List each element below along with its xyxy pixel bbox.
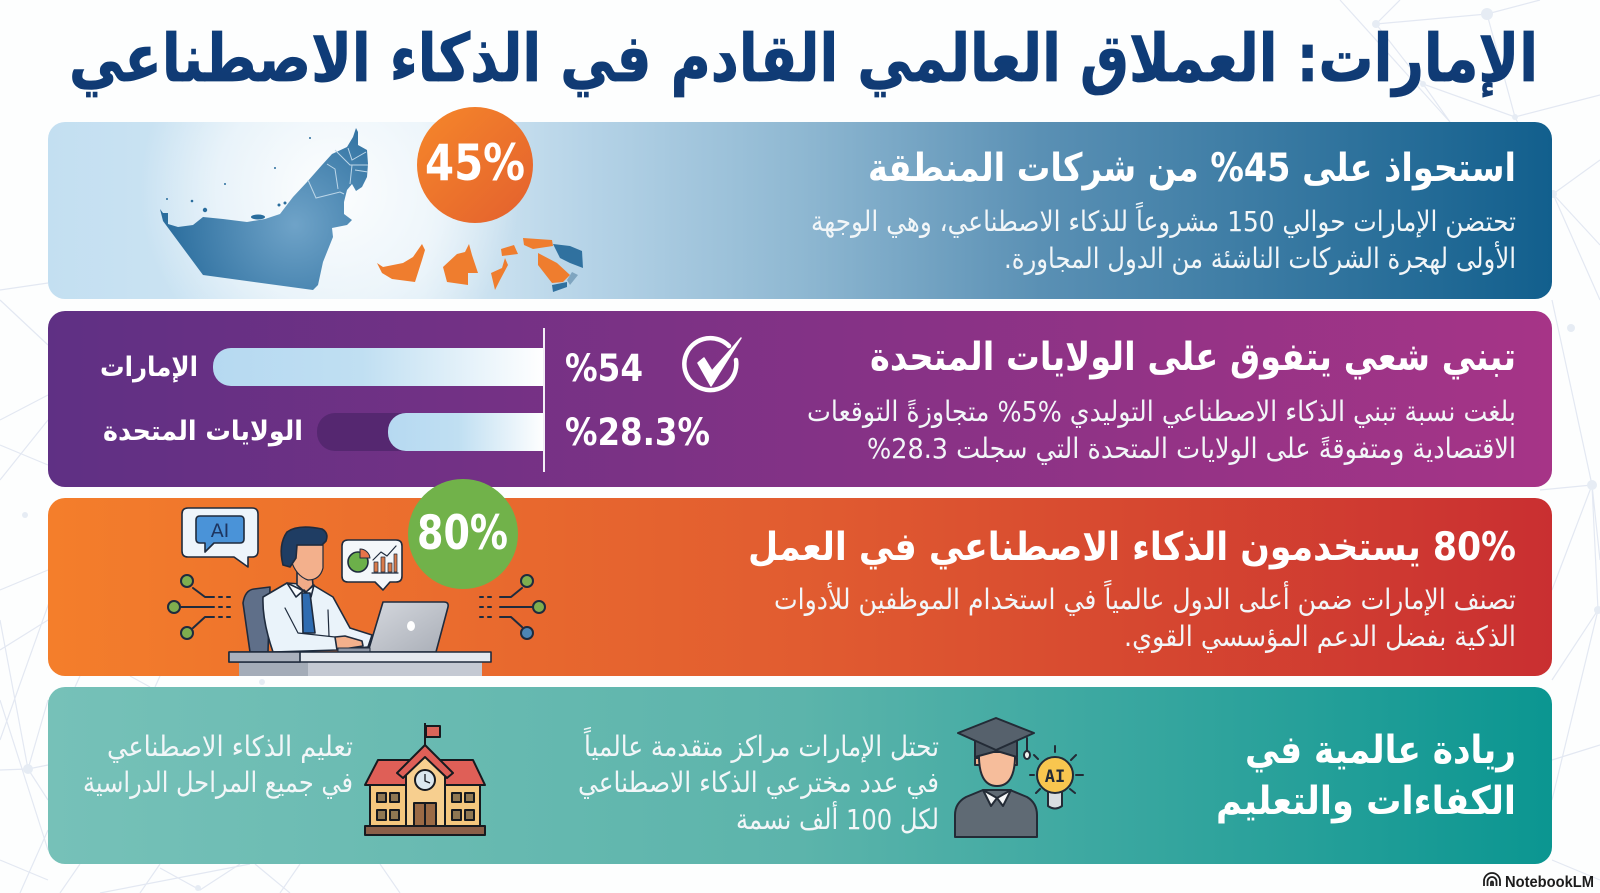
employee [263, 527, 372, 652]
text: AI inventors [578, 726, 939, 836]
badge: 80%: 80% [417, 506, 508, 561]
badge: 80% [408, 479, 518, 589]
bar: UAE: الإمارات [100, 352, 198, 383]
icon: school building [365, 723, 485, 835]
heading: استحواذ على 45% من شركات المنطقة [868, 146, 1516, 191]
text: AI education [83, 730, 353, 799]
speech bubble: AI [182, 508, 258, 567]
body text: تحتضن الإمارات حوالي 150 مشروعاً للذكاء الاصطناعي، وهي الوجهة [811, 201, 1516, 238]
text: AI education: تعليم الذكاء الاصطناعي [107, 730, 353, 763]
heading: ريادة عالمية في [1245, 728, 1516, 773]
bar: USA: الولايات المتحدة [103, 416, 303, 447]
map: UAE [160, 128, 368, 290]
panel: 45 percent of regional companies [48, 107, 1552, 299]
desk [229, 652, 491, 676]
body text: الاقتصادية ومتفوقةً على الولايات المتحدة التي سجلت 28.3% [867, 432, 1516, 465]
text: AI education: في جميع المراحل الدراسية [83, 766, 353, 799]
panel: leadership in talent and education [48, 687, 1552, 864]
heading: تبني شعي يتفوق على الولايات المتحدة [870, 335, 1516, 380]
icon: check mark [684, 338, 741, 390]
body text: الأولى لهجرة الشركات الناشئة من الدول المجاورة. [1004, 240, 1516, 275]
bar: UAE: %54 [565, 347, 643, 390]
chair [243, 587, 270, 652]
speech bubble: AI: AI [211, 520, 229, 542]
text: AI inventors: تحتل الإمارات مراكز متقدمة عالمياً [584, 726, 939, 763]
heading [1216, 728, 1516, 824]
bar: USA [103, 411, 710, 454]
illustration: employee at desk [168, 508, 545, 676]
network nodes right [480, 575, 545, 639]
panel: popular adoption beats USA [48, 311, 1552, 487]
bar: UAE [100, 347, 643, 390]
map group: neighbouring countries [377, 238, 583, 292]
body text: بلغت نسبة تبني الذكاء الاصطناعي التوليدي %5% متجاوزةً التوقعات [807, 395, 1516, 428]
icon: graduate with AI bulb: AI [1045, 767, 1065, 787]
speech bubble: charts [342, 540, 402, 590]
panel: 80 percent use AI at work [48, 479, 1552, 676]
body text: الذكية بفضل الدعم المؤسسي القوي. [1124, 620, 1516, 653]
body text [811, 201, 1516, 275]
text: AI inventors: لكل 100 ألف نسمة [736, 800, 939, 836]
body text [807, 395, 1516, 465]
logo: NotebookLM: NotebookLM [1505, 874, 1594, 891]
heading: ‎80%‎ يستخدمون الذكاء الاصطناعي في العمل [748, 525, 1516, 570]
bar chart: adoption comparison [100, 328, 710, 472]
heading: الكفاءات والتعليم [1216, 779, 1516, 824]
body text [774, 579, 1516, 653]
laptop [338, 602, 448, 652]
text: AI inventors: في عدد مخترعي الذكاء الاصطناعي [578, 766, 939, 799]
bar: USA: %28.3% [565, 411, 710, 454]
network nodes left [168, 575, 235, 639]
badge: 45% [417, 107, 533, 223]
body text: تصنف الإمارات ضمن أعلى الدول عالمياً في استخدام الموظفين للأدوات [774, 579, 1516, 616]
icon: graduate with AI bulb [955, 718, 1083, 837]
badge: 45%: 45% [425, 134, 525, 192]
